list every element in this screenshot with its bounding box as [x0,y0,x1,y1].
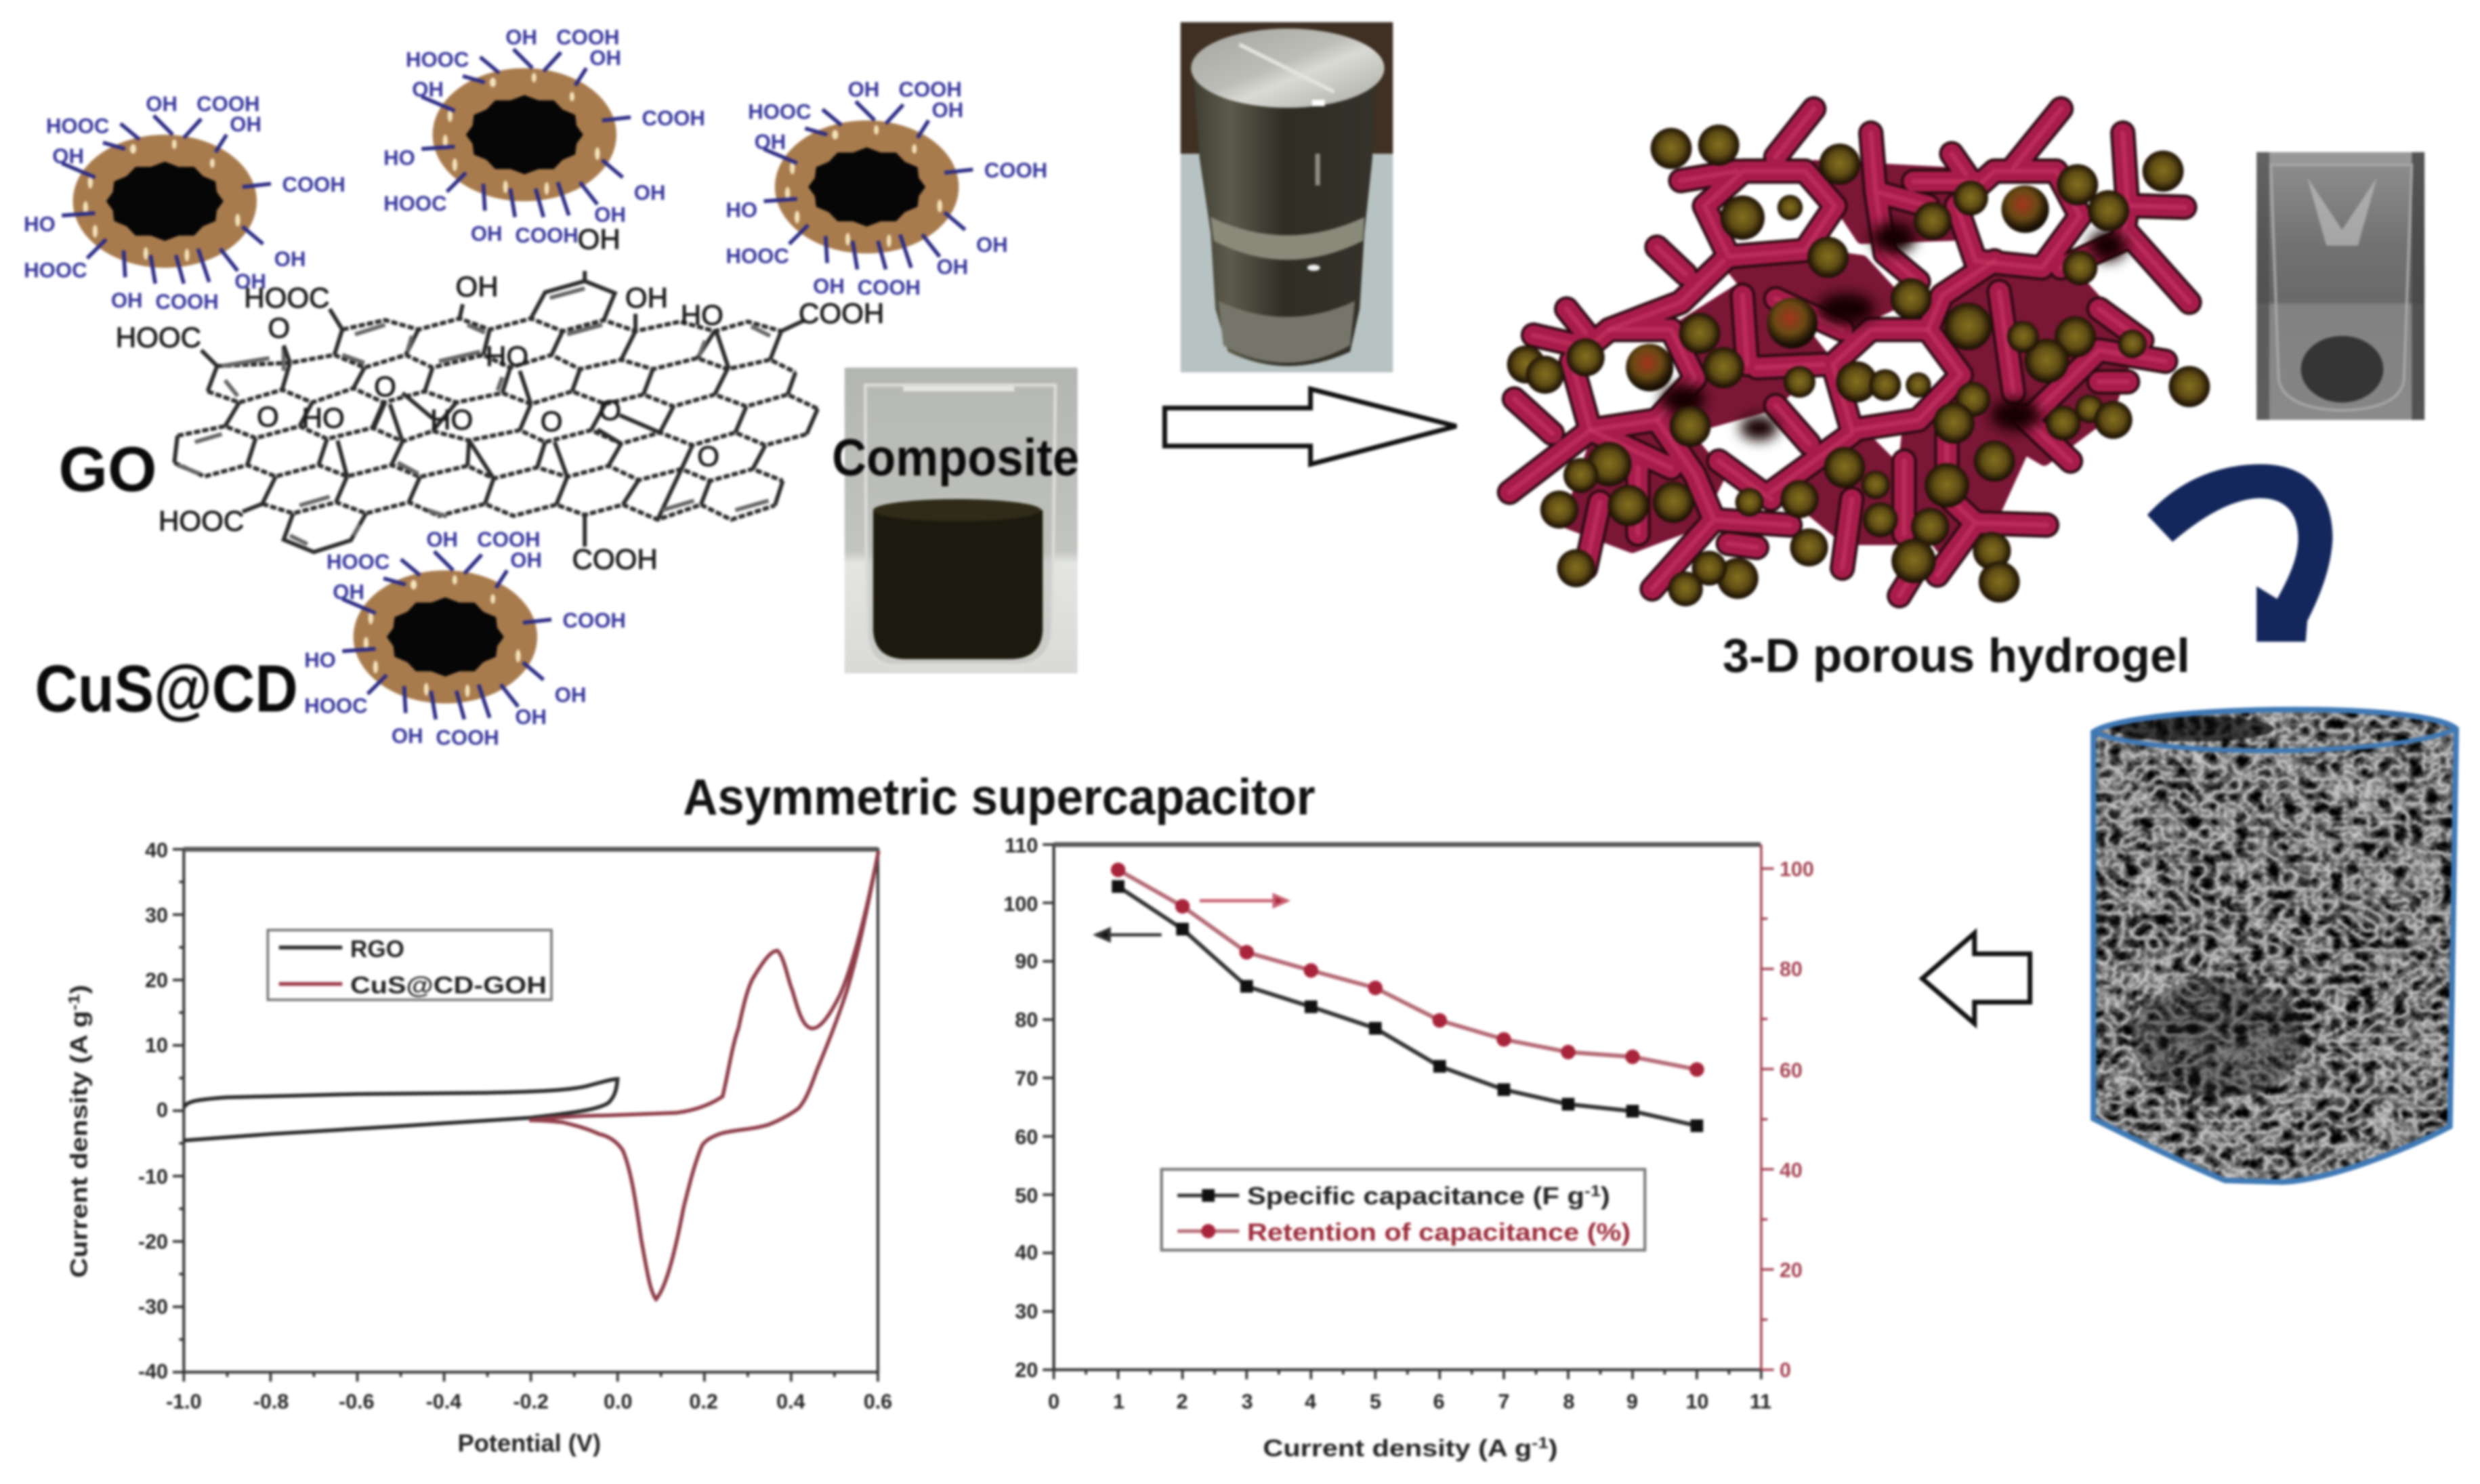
icon: CuS@CD particle bottom: OH [510,548,542,572]
graphene oxide molecular structure: COOH [572,543,658,575]
chart: cyclic voltammetry: 0.4 [776,1391,805,1414]
chart: capacitance and retention: 4 [1305,1391,1316,1414]
chart: capacitance and retention: 40 [1780,1159,1803,1182]
y axis title: ) [66,985,93,994]
chart: cyclic voltammetry: 20 [145,969,168,992]
arrow: aerogel to device test [1922,933,2030,1023]
graphene oxide molecular structure: OH [578,223,621,255]
chart: cyclic voltammetry [65,839,892,1457]
icon: CuS@CD particle top right: OH [848,78,879,102]
chart: capacitance and retention: 7 [1498,1391,1509,1414]
graphene oxide molecular structure: O [374,370,396,402]
CuS@CD-GOH curve [529,851,879,1299]
icon: CuS@CD particle top centre: OH [505,26,537,49]
icon: CuS@CD particle top centre: OH [471,222,503,246]
x axis title: Potential (V) [458,1429,601,1457]
chart: capacitance and retention: 110 [1005,834,1038,857]
chart: cyclic voltammetry: 30 [145,904,168,927]
icon: CuS@CD particle top right: HOOC [726,244,789,268]
icon: CuS@CD particle top centre: COOH [515,224,579,247]
icon: CuS@CD particle top centre: COOH [556,26,620,49]
icon: CuS@CD particle bottom: HOOC [304,694,368,718]
3-D porous hydrogel network [1507,109,2210,606]
graphene oxide molecular structure [116,223,884,575]
icon: CuS@CD particle top left: OH [230,112,261,136]
icon: CuS@CD particle top centre: COOH [642,106,705,130]
chart: cyclic voltammetry: 0.6 [864,1391,892,1414]
icon: CuS@CD particle top left: COOH [196,92,260,116]
icon: CuS@CD particle top right: OH [976,233,1008,257]
photo: hydrothermal autoclave [1181,22,1393,373]
graphene oxide molecular structure: O [257,400,279,432]
icon: CuS@CD particle top centre: HOOC [406,47,469,71]
y axis title: Current density (A g [66,1051,93,1278]
chart: cyclic voltammetry: -1.0 [166,1391,202,1414]
chart: capacitance and retention: 40 [1015,1242,1038,1265]
graphene oxide molecular structure: HO [430,404,473,436]
chart: cyclic voltammetry: -0.4 [426,1391,461,1414]
icon: CuS@CD particle top left: OH [274,247,306,271]
chart: capacitance and retention: 90 [1015,950,1038,973]
graphene oxide molecular structure: HOOC [159,505,244,537]
chart: cyclic voltammetry: 0.0 [604,1391,632,1414]
chart: capacitance and retention: 8 [1563,1391,1574,1414]
icon: CuS@CD particle top left: HOOC [24,258,87,282]
icon: CuS@CD particle top right: COOH [984,158,1047,182]
icon: CuS@CD particle bottom: HOOC [327,550,390,574]
icon: CuS@CD particle top right: COOH [898,78,962,102]
chart: capacitance and retention: 3 [1242,1391,1253,1414]
icon: CuS@CD particle top centre: HOOC [383,192,447,215]
icon: CuS@CD particle bottom: OH [333,580,364,603]
legend: ) [1601,1182,1610,1210]
legend: Retention of capacitance (%) [1247,1218,1631,1246]
chart: capacitance and retention: 1 [1113,1391,1125,1414]
icon: CuS@CD particle top right [726,78,1047,299]
graphene oxide molecular structure: HO [681,299,723,331]
icon: CuS@CD particle top centre: OH [634,181,665,205]
icon: CuS@CD particle top left: OH [111,289,142,312]
chart: capacitance and retention [1004,834,1814,1462]
chart: capacitance and retention: 9 [1626,1391,1638,1414]
legend: CuS@CD-GOH [350,973,547,999]
icon: CuS@CD particle bottom: COOH [436,725,499,749]
graphene oxide molecular structure: O [599,394,621,426]
icon: CuS@CD particle bottom: OH [392,724,423,748]
icon: CuS@CD particle top right: OH [932,98,963,122]
chart: capacitance and retention: 6 [1433,1391,1445,1414]
icon: CuS@CD particle top centre: HO [383,146,415,169]
chart: cyclic voltammetry: -20 [138,1230,168,1253]
chart: capacitance and retention: 80 [1015,1009,1038,1032]
chart: cyclic voltammetry: -40 [138,1360,168,1383]
arrow: points to left axis [1097,929,1162,940]
RGO curve [184,1079,618,1141]
chart: cyclic voltammetry: 10 [145,1034,168,1057]
specific capacitance series [1112,880,1703,1132]
chart: capacitance and retention: 60 [1015,1126,1038,1149]
chart: capacitance and retention: 100 [1004,893,1038,916]
chart: cyclic voltammetry: 0 [156,1099,168,1122]
chart: capacitance and retention: 50 [1015,1185,1038,1208]
hydrogel polymer branches [1509,109,2189,596]
graphene oxide molecular structure: HOOC [244,282,330,314]
chart: capacitance and retention: 80 [1780,958,1803,981]
legend: RGO [350,936,404,962]
icon: CuS@CD particle top left: HOOC [46,114,109,138]
legend: Specific capacitance (F g [1247,1182,1540,1210]
icon: CuS@CD particle top centre: OH [589,46,621,70]
chart: capacitance and retention: 20 [1780,1258,1803,1281]
photo: hydrogel in vial [2256,152,2424,420]
legend [1162,1169,1645,1250]
icon: CuS@CD particle top left [24,92,345,314]
icon: CuS@CD particle top left: HO [24,213,56,236]
label: 3-D porous hydrogel: 3-D porous hydrogel [1723,629,2190,682]
legend: -1 [1584,1182,1601,1200]
retention series [1111,863,1704,1077]
hydrogel interior fill [1569,167,2131,547]
icon: CuS@CD particle top right: HO [726,198,757,221]
arrow: composite to hydrogel [1164,389,1456,464]
icon: CuS@CD particle top right: COOH [858,276,921,299]
graphene oxide molecular structure: COOH [799,297,884,329]
heading: Asymmetric supercapacitor: Asymmetric supercapacitor [683,768,1316,825]
graphene oxide molecular structure: O [541,405,562,437]
photo: composite beaker [845,368,1078,673]
reddish spheres [1626,186,2049,391]
icon: CuS@CD particle top left: COOH [282,173,345,196]
chart: capacitance and retention: 30 [1015,1300,1038,1323]
chart: capacitance and retention: 0 [1048,1391,1059,1414]
chart: capacitance and retention: 11 [1750,1391,1771,1414]
chart: cyclic voltammetry: -0.2 [513,1391,549,1414]
chart: cyclic voltammetry: -30 [138,1295,168,1318]
chart: cyclic voltammetry: -0.6 [339,1391,375,1414]
icon: CuS@CD particle top right: HOOC [748,100,812,123]
graphene oxide molecular structure: O [697,440,719,472]
graphene oxide molecular structure: O [268,312,290,343]
graphene oxide molecular structure: HOOC [116,321,201,353]
icon: CuS@CD particle bottom [304,528,626,749]
icon: CuS@CD particle bottom: OH [515,705,547,729]
curved arrow: hydrogel to freeze-dried aerogel [2147,464,2332,641]
label: CuS@CD: CuS@CD [35,651,298,725]
chart: capacitance and retention: 10 [1685,1391,1708,1414]
dark shadow patches [1661,222,2126,440]
y axis title: -1 [65,994,83,1011]
icon: CuS@CD particle top centre [383,26,705,247]
icon: CuS@CD particle top left: OH [52,144,84,168]
chart: capacitance and retention: 5 [1370,1391,1381,1414]
icon: CuS@CD particle bottom: OH [426,528,458,551]
chart: capacitance and retention: 0 [1780,1359,1791,1382]
chart: cyclic voltammetry: -0.8 [253,1391,289,1414]
icon: CuS@CD particle top left: OH [234,270,266,293]
x axis title: Current density (A g [1263,1435,1490,1462]
icon: CuS@CD particle bottom: HO [304,648,336,672]
chart: capacitance and retention: 100 [1780,858,1814,881]
icon: CuS@CD particle bottom: OH [555,683,586,706]
icon: CuS@CD particle top centre: OH [412,78,444,102]
icon: CuS@CD particle top right: OH [937,255,968,279]
graphene oxide molecular structure: OH [625,282,668,314]
chart: capacitance and retention: 70 [1015,1067,1038,1090]
legend [268,930,551,1000]
icon: CuS@CD particle bottom: COOH [563,608,626,632]
icon: CuS@CD particle top left: COOH [155,290,219,314]
x axis title: ) [1549,1435,1558,1462]
chart: capacitance and retention: 60 [1780,1059,1803,1082]
icon: CuS@CD particle bottom: COOH [477,528,541,551]
chart: capacitance and retention: 20 [1015,1359,1038,1382]
graphene oxide molecular structure: OH [456,270,499,302]
icon: CuS@CD particle top right: OH [813,274,845,298]
icon: CuS@CD particle top centre: OH [594,203,626,227]
icon: CuS@CD particle top right: OH [755,130,786,154]
SEM image cylinder [2084,697,2464,1188]
CuS@CD spheres [1507,125,2210,606]
chart: cyclic voltammetry: 0.2 [690,1391,718,1414]
graphene oxide molecular structure: HO [486,340,528,372]
x axis title: -1 [1532,1434,1549,1451]
chart: cyclic voltammetry: 40 [145,839,168,862]
label: Composite: Composite [832,429,1079,487]
graphene oxide molecular structure: HO [302,402,345,434]
icon: CuS@CD particle top left: OH [146,92,177,116]
chart: capacitance and retention: 2 [1177,1391,1188,1414]
label: GO: GO [59,433,157,505]
arrow: points to right axis [1200,895,1287,906]
chart: cyclic voltammetry: -10 [138,1165,168,1188]
